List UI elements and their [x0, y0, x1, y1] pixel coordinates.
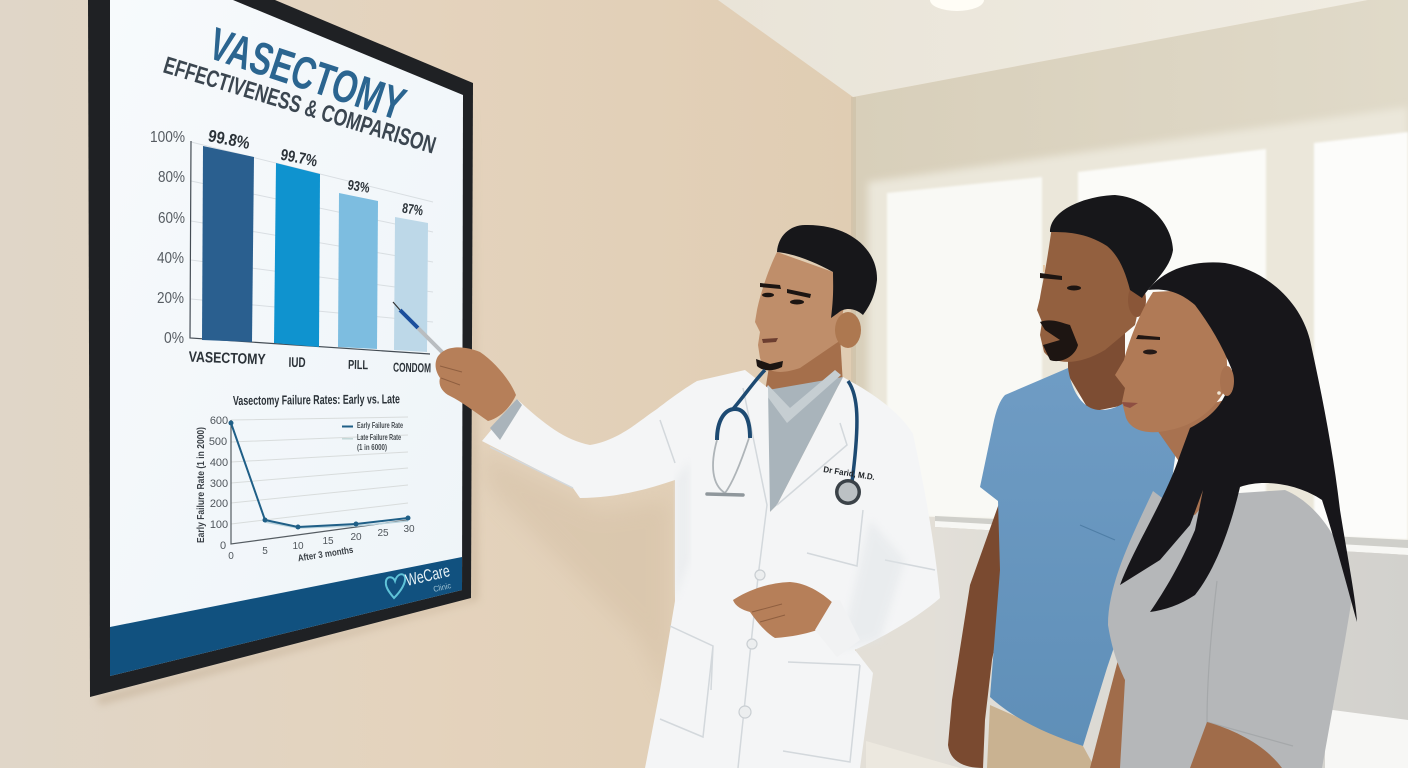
doctor's pointing hand [436, 347, 516, 421]
icon: heart [386, 574, 405, 598]
x axis labels: 5 [262, 546, 268, 557]
x axis labels: 10 [292, 541, 304, 552]
y axis labels [209, 415, 228, 552]
y axis labels: 100% [150, 129, 185, 146]
y axis labels: 400 [210, 457, 228, 469]
y axis labels: 40% [157, 250, 184, 267]
t-shirt pocket line [1080, 525, 1115, 540]
late failure line [265, 521, 408, 528]
woman's far arm [1190, 722, 1282, 768]
y axis labels: 60% [158, 210, 185, 227]
bar: condom [394, 217, 428, 352]
man's hair [1050, 195, 1173, 298]
back wall with window blinds [851, 0, 1408, 768]
early failure line [228, 420, 410, 530]
man's face [1037, 226, 1145, 362]
category labels: PILL [348, 357, 368, 372]
doctor's resting hand [733, 582, 835, 638]
x axis labels: 25 [377, 528, 389, 539]
woman's neck [1150, 400, 1225, 515]
doctor's brows, eyes, goatee [756, 283, 811, 370]
man's neck [1068, 330, 1125, 412]
y axis labels: 0% [164, 330, 184, 347]
legend [342, 421, 403, 452]
doctor's hair [777, 225, 877, 318]
x axis labels: 30 [403, 524, 415, 535]
value labels: 99.7% [279, 147, 319, 170]
x axis title: After 3 months [297, 545, 354, 564]
doctor's face [755, 252, 845, 372]
pen [393, 302, 446, 356]
coat shading and seams [490, 388, 935, 768]
line chart: failure rates [196, 391, 415, 564]
woman's brow, eye and lips [1122, 335, 1160, 408]
man's brow, eye and beard [1040, 265, 1081, 361]
y axis labels: 500 [209, 436, 227, 448]
logo: WeCare: WeCare [404, 561, 452, 590]
category labels: IUD [288, 354, 306, 370]
poster shadow [96, 90, 478, 705]
legend: (1 in 6000) [357, 443, 387, 452]
legend: Late Failure Rate [357, 433, 401, 442]
stethoscope [707, 370, 857, 495]
x axis labels: 0 [228, 551, 234, 562]
x axis labels [228, 524, 415, 562]
woman's hair [1120, 262, 1357, 622]
doctor [393, 225, 940, 768]
bar: IUD [274, 163, 320, 347]
coat buttons [739, 570, 765, 718]
doctor arm shadow on wall [480, 450, 670, 700]
bar chart: effectiveness [150, 126, 433, 375]
man in blue t-shirt [948, 195, 1176, 768]
poster footer band [110, 557, 462, 676]
line chart title: Vasectomy Failure Rates: Early vs. Late [233, 391, 400, 408]
woman's ear [1220, 366, 1234, 396]
category labels [188, 349, 431, 375]
poster frame [88, 0, 473, 697]
value labels [207, 126, 425, 218]
man's ear [1128, 283, 1146, 317]
y axis labels: 80% [158, 169, 185, 186]
shirt cuff [490, 399, 522, 440]
shirt collar [764, 370, 841, 423]
y axis labels: 20% [157, 290, 184, 307]
y axis labels: 300 [210, 478, 228, 490]
man's arm [948, 495, 1012, 768]
y axis labels [150, 129, 185, 347]
poster subtitle: EFFECTIVENESS & COMPARISON [160, 52, 439, 160]
y axis labels: 200 [210, 498, 228, 510]
category labels: CONDOM [393, 360, 431, 375]
legend: Early Failure Rate [357, 421, 403, 430]
value labels: 87% [401, 200, 425, 218]
logo: WeCare: Clinic [432, 581, 452, 594]
x axis labels: 20 [350, 532, 362, 543]
bar: pill [338, 193, 378, 349]
ceiling [718, 0, 1368, 97]
y axis labels: 600 [210, 415, 228, 427]
logo: WeCare [386, 561, 452, 598]
x axis labels: 15 [322, 536, 334, 547]
woman in grey t-shirt [1090, 262, 1357, 768]
bar: vasectomy [202, 146, 254, 342]
category labels: VASECTOMY [188, 349, 266, 368]
woman's near arm [1090, 660, 1150, 768]
poster title: VASECTOMY [203, 17, 412, 130]
woman's face [1115, 290, 1228, 432]
coat name tag: Dr Farid, M.D. [823, 464, 876, 482]
woman's earring [1217, 391, 1221, 395]
doctor's neck [765, 335, 843, 392]
poster [88, 0, 473, 697]
stethoscope chest piece [835, 479, 861, 505]
doctor's ear [835, 312, 861, 348]
lab coat [482, 370, 940, 768]
t-shirt sleeve edge [1207, 581, 1293, 746]
side wall [0, 0, 853, 768]
grey shirt [762, 377, 843, 512]
grey t-shirt [1108, 490, 1353, 768]
coat cuff [815, 600, 860, 657]
poster surface [110, 0, 463, 676]
y axis title: Early Failure Rate (1 in 2000) [196, 427, 207, 543]
value labels: 99.8% [207, 126, 251, 153]
y axis labels: 0 [220, 540, 226, 552]
man's trousers [987, 705, 1095, 768]
blue t-shirt [980, 368, 1176, 746]
y axis labels: 100 [210, 519, 228, 531]
value labels: 93% [347, 176, 371, 196]
